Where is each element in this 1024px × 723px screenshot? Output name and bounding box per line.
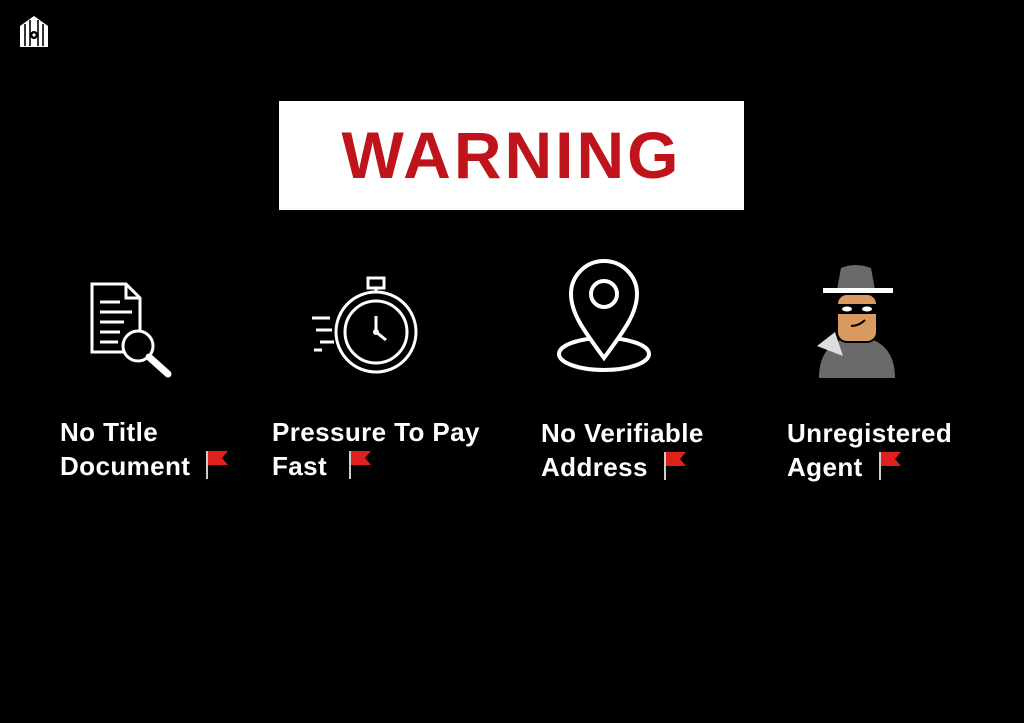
label: no verifiable address: No Verifiable: [541, 418, 704, 448]
label: no title document: No Title: [60, 417, 158, 447]
label: no title document: [60, 417, 228, 481]
icon: stopwatch: [312, 276, 418, 374]
label: pressure to pay fast: Pressure To Pay: [272, 417, 480, 447]
logo: [20, 16, 48, 47]
label: unregistered agent: [787, 418, 952, 482]
icon: document search: [90, 282, 172, 378]
title banner: WARNING: [342, 118, 681, 192]
label: no title document: Document: [60, 451, 190, 481]
label: unregistered agent: Unregistered: [787, 418, 952, 448]
icon: spy agent: [817, 265, 895, 378]
label: no verifiable address: Address: [541, 452, 648, 482]
label: no verifiable address: [541, 418, 704, 482]
label: pressure to pay fast: Fast: [272, 451, 327, 481]
icon: location pin: [557, 259, 651, 372]
label: unregistered agent: Agent: [787, 452, 863, 482]
label: pressure to pay fast: [272, 417, 480, 481]
title banner: [279, 101, 744, 210]
